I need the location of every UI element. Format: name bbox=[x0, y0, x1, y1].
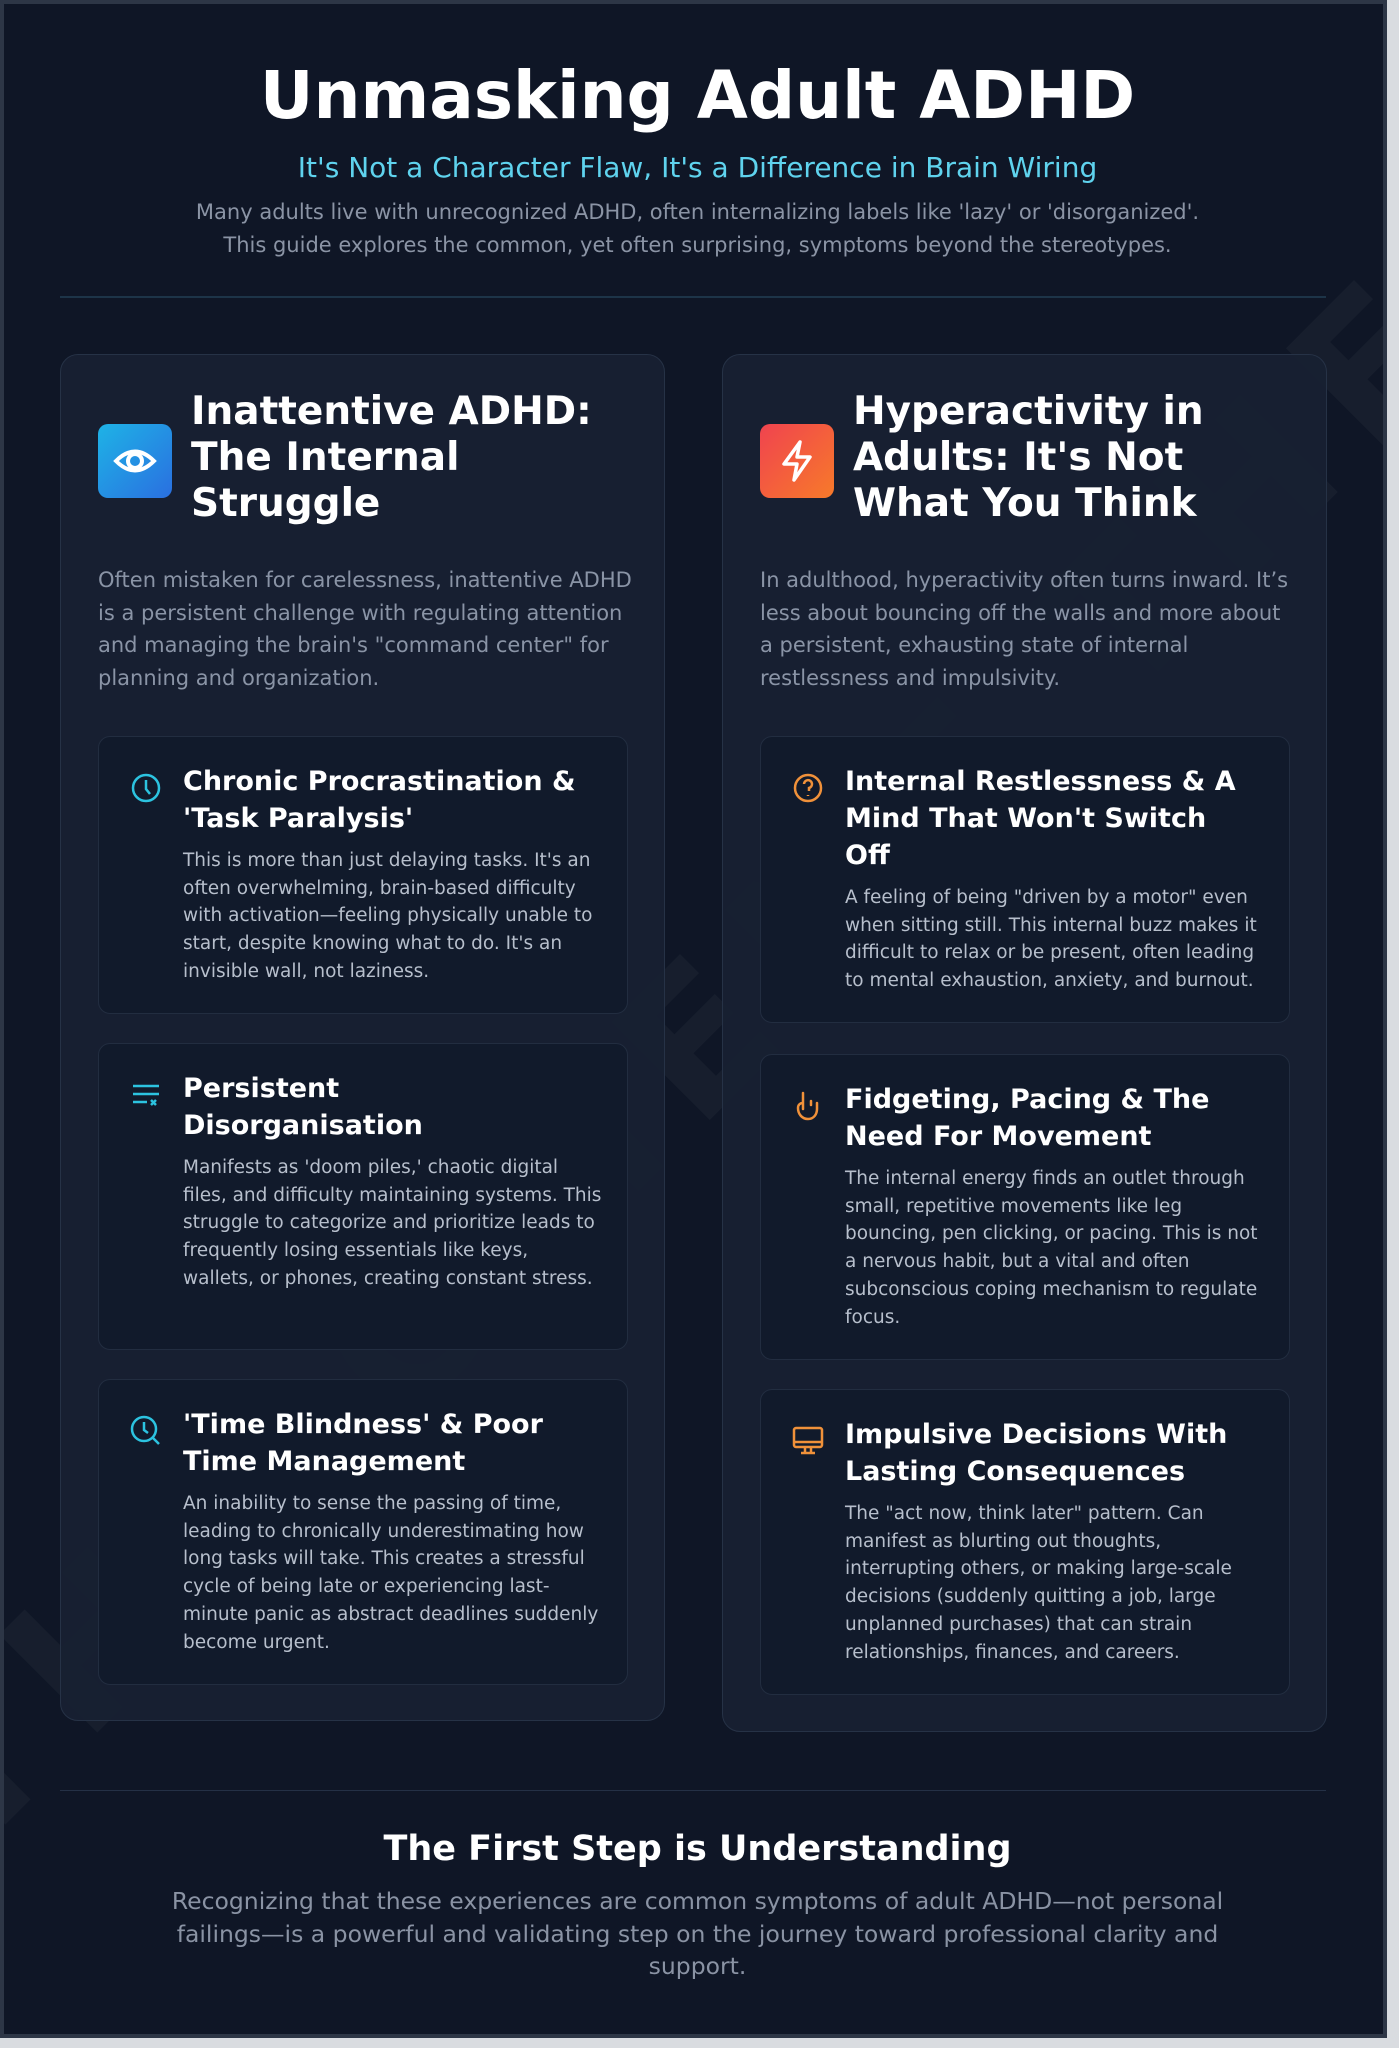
panel heading: Inattentive ADHD: The Internal Struggle bbox=[191, 389, 592, 526]
card: procrastination: Chronic Procrastination & 'Task Paralysis' bbox=[183, 766, 576, 834]
icon: clock bbox=[132, 774, 160, 802]
icon: lightning bbox=[760, 424, 834, 498]
card: time blindness: An inability to sense the passing of time, leading to chronically underestimating how long tasks will take. This creates a stressful cycle of being late or experiencing last-minute panic as abstract deadlines suddenly become urgent. bbox=[183, 1493, 598, 1653]
card: disorganisation bbox=[98, 1043, 628, 1350]
subtitle: It's Not a Character Flaw, It's a Difference in Brain Wiring bbox=[298, 151, 1097, 184]
icon: eye bbox=[98, 424, 172, 498]
card: restlessness: A feeling of being "driven by a motor" even when sitting still. This internal buzz makes it difficult to relax or be present, often leading to mental exhaustion, anxiety, and burnout. bbox=[845, 887, 1257, 991]
panel heading: Hyperactivity in Adults: It's Not What You Think bbox=[853, 389, 1204, 526]
card: fidgeting: Fidgeting, Pacing & The Need For Movement bbox=[845, 1084, 1209, 1152]
card: procrastination bbox=[98, 736, 628, 1014]
card: time blindness bbox=[98, 1379, 628, 1685]
icon: hand bbox=[796, 1092, 818, 1120]
card: procrastination: This is more than just delaying tasks. It's an often overwhelming, brain-based difficulty with activation—feeling physically unable to start, despite knowing what to do. It's an invisible wall, not laziness. bbox=[183, 850, 592, 982]
card: restlessness: Internal Restlessness & A Mind That Won't Switch Off bbox=[845, 766, 1236, 871]
panel description: Often mistaken for carelessness, inattentive ADHD is a persistent challenge with regulating attention and managing the brain's "command center" for planning and organization. bbox=[98, 568, 632, 690]
footer text: Recognizing that these experiences are common symptoms of adult ADHD—not personal failings—is a powerful and validating step on the journey toward professional clarity and support. bbox=[172, 1887, 1223, 1980]
card: impulsive decisions bbox=[760, 1389, 1290, 1695]
intro text bbox=[196, 200, 1199, 256]
card: impulsive decisions: Impulsive Decisions With Lasting Consequences bbox=[845, 1419, 1227, 1487]
card: impulsive decisions: The "act now, think later" pattern. Can manifest as blurting out thoughts, interrupting others, or making large-scale decisions (suddenly quitting a job, large unplanned purchases) that can strain relationships, finances, and careers. bbox=[845, 1503, 1232, 1663]
card: disorganisation: Persistent Disorganisation bbox=[183, 1073, 423, 1141]
panel description: In adulthood, hyperactivity often turns inward. It’s less about bouncing off the walls and more about a persistent, exhausting state of internal restlessness and impulsivity. bbox=[760, 568, 1288, 690]
card: fidgeting: The internal energy finds an outlet through small, repetitive movements like leg bouncing, pen clicking, or pacing. This is not a nervous habit, but a vital and often subconscious coping mechanism to regulate focus. bbox=[845, 1168, 1258, 1328]
card: time blindness: 'Time Blindness' & Poor Time Management bbox=[183, 1409, 543, 1477]
icon: question bbox=[794, 774, 822, 802]
card: fidgeting bbox=[760, 1054, 1290, 1360]
panel: hyperactivity bbox=[722, 354, 1327, 1732]
icon: monitor bbox=[792, 1426, 824, 1454]
intro text: This guide explores the common, yet often surprising, symptoms beyond the stereotypes. bbox=[223, 232, 1172, 256]
panel: inattentive ADHD bbox=[60, 354, 665, 1721]
footer heading: The First Step is Understanding bbox=[383, 1829, 1012, 1869]
title: Unmasking Adult ADHD bbox=[260, 57, 1135, 134]
icon: list bbox=[133, 1084, 159, 1106]
icon: clock search bbox=[130, 1416, 160, 1445]
intro text: Many adults live with unrecognized ADHD, often internalizing labels like 'lazy' or 'disorganized'. bbox=[196, 200, 1199, 224]
card: restlessness bbox=[760, 736, 1290, 1023]
card: disorganisation: Manifests as 'doom piles,' chaotic digital files, and difficulty maintaining systems. This struggle to categorize and prioritize leads to frequently losing essentials like keys, wallets, or phones, creating constant stress. bbox=[183, 1157, 601, 1289]
